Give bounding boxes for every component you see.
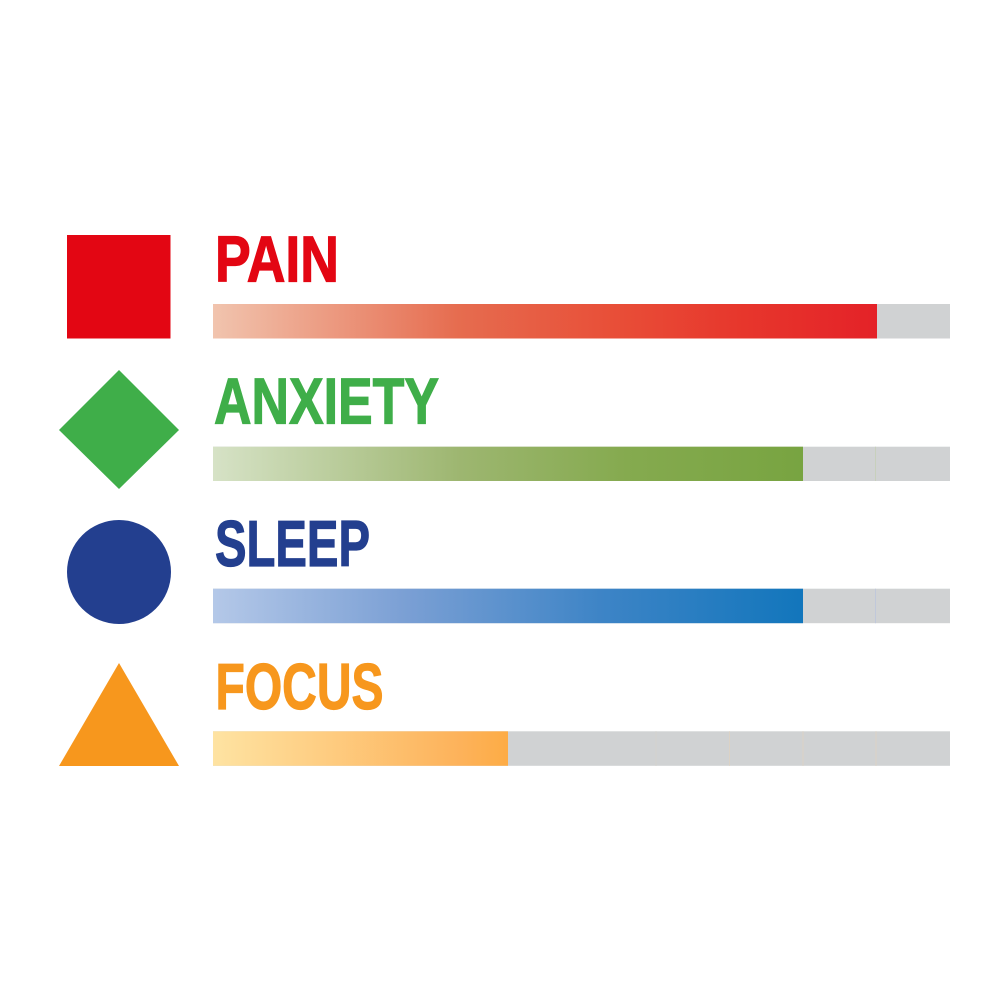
row: focus xyxy=(59,650,950,766)
icon: blue circle xyxy=(67,520,171,624)
heading: focus: FOCUS xyxy=(216,650,384,723)
icon: red square xyxy=(67,235,170,338)
row: pain xyxy=(67,222,950,338)
row: sleep xyxy=(67,507,950,624)
bar: sleep level xyxy=(213,589,950,623)
bar: anxiety level xyxy=(213,447,950,481)
heading: anxiety: ANXIETY xyxy=(214,364,439,438)
icon: green diamond xyxy=(59,370,179,489)
heading: sleep: SLEEP xyxy=(215,507,370,580)
icon: orange triangle xyxy=(59,663,179,766)
bar: focus level xyxy=(213,731,950,766)
heading: pain: PAIN xyxy=(215,222,339,296)
row: anxiety xyxy=(59,364,950,489)
bar: pain level xyxy=(213,304,950,338)
